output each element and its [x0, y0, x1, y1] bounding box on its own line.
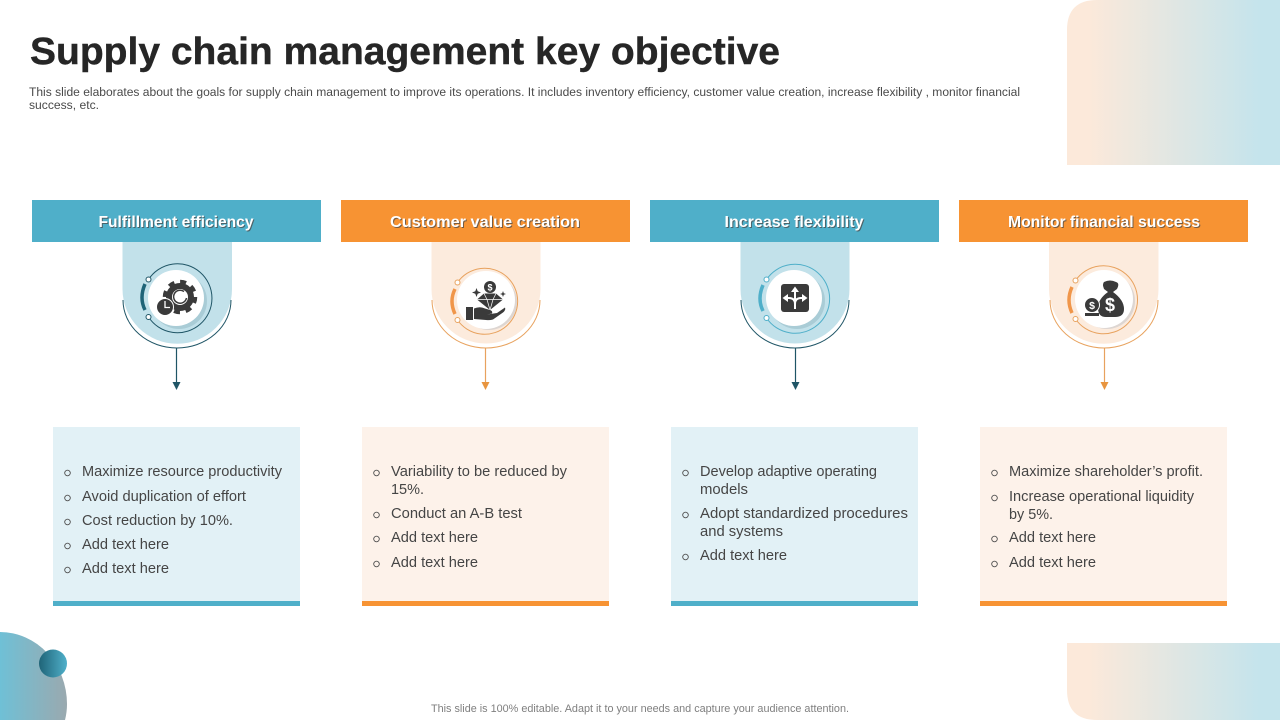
heading: monitor financial success — [959, 200, 1248, 242]
tab with ring — [740, 242, 850, 348]
list card: and systems — [700, 523, 783, 540]
subtitle text block: This slide elaborates about the goals for supply chain management to improve its operations. It includes inventory efficiency, customer value creation, increase flexibility , monitor financial — [29, 85, 1020, 99]
tab with ring — [1049, 242, 1158, 348]
list card: Add text here — [391, 529, 478, 546]
list card — [53, 427, 300, 606]
heading: fulfillment efficiency: Fulfillment efficiency — [100, 215, 255, 232]
list card: by 5%. — [1009, 506, 1053, 523]
panel: monitor financial success — [959, 200, 1248, 606]
heading: customer value creation: Customer value creation — [391, 215, 581, 232]
heading: fulfillment efficiency — [32, 200, 321, 242]
icon: money bag and coin — [1084, 280, 1124, 317]
arrow — [792, 348, 800, 390]
panel: increase flexibility — [650, 200, 939, 606]
arrow — [482, 348, 490, 390]
heading: increase flexibility: Increase flexibility — [726, 215, 865, 232]
list card: Add text here — [391, 554, 478, 571]
tab with ring — [432, 242, 540, 348]
title: Supply chain management key objective — [30, 31, 780, 73]
decorative corner: top right gradient — [1067, 0, 1280, 165]
list card: Add text here — [1009, 529, 1096, 546]
list card: Increase operational liquidity — [1009, 488, 1194, 505]
list card — [362, 427, 609, 606]
list card: Maximize resource productivity — [82, 463, 282, 480]
heading: monitor financial success: Monitor financial success — [1009, 215, 1201, 232]
subtitle text block: success, etc. — [29, 98, 99, 112]
icon: hand with diamond — [466, 281, 506, 320]
heading: fulfillment efficiency: Fulfillment efficiency — [98, 214, 254, 231]
icon: gear with clock — [156, 282, 195, 316]
panel: customer value creation — [341, 200, 630, 606]
list card: Avoid duplication of effort — [82, 488, 247, 505]
footer note: This slide is 100% editable. Adapt it to your needs and capture your audience attention. — [431, 703, 849, 715]
panel: fulfillment efficiency — [32, 200, 321, 606]
heading: increase flexibility: Increase flexibility — [724, 214, 864, 231]
icon: money bag and coin: $ — [1089, 300, 1095, 312]
arrow — [172, 348, 180, 390]
list card: Cost reduction by 10%. — [82, 512, 233, 529]
heading: customer value creation — [341, 200, 630, 242]
icon: hand with diamond: $ — [487, 282, 493, 292]
list card: Develop adaptive operating — [700, 463, 877, 480]
tab with ring — [122, 242, 232, 348]
icon: branching arrows — [781, 284, 809, 312]
list card — [980, 427, 1227, 606]
icon: money bag and coin: $ — [1105, 295, 1115, 315]
subtitle text block — [29, 85, 1020, 112]
heading: monitor financial success: Monitor financial success — [1008, 214, 1200, 231]
list card: Adopt standardized procedures — [700, 505, 908, 522]
heading: customer value creation: Customer value creation — [390, 214, 580, 231]
list card: 15%. — [391, 481, 424, 498]
list card: models — [700, 481, 748, 498]
list card: Add text here — [700, 547, 787, 564]
list card: Maximize shareholder’s profit. — [1009, 463, 1203, 480]
heading: increase flexibility — [650, 200, 939, 242]
decorative corner: bottom right gradient — [1067, 643, 1280, 720]
list card: Variability to be reduced by — [391, 463, 567, 480]
arrow — [1100, 348, 1108, 390]
list card: Add text here — [82, 536, 169, 553]
list card: Add text here — [82, 560, 169, 577]
list card: Conduct an A-B test — [391, 505, 523, 522]
list card — [671, 427, 918, 606]
decorative circles: bottom left — [0, 632, 67, 720]
list card: Add text here — [1009, 554, 1096, 571]
